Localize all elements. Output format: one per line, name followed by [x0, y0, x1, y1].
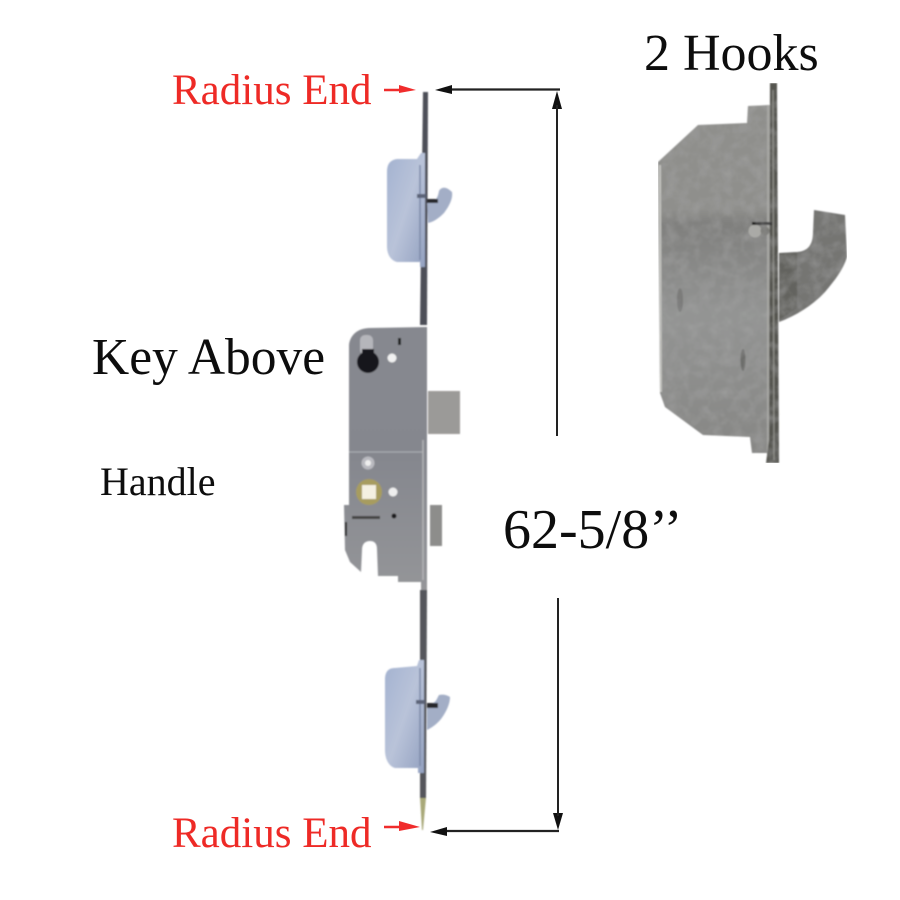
lower hook bolt: [385, 660, 450, 773]
latch bolt: [428, 391, 460, 434]
rod: upper: [420, 92, 428, 325]
upper hook bolt: [387, 153, 452, 267]
rod: brass tip: [420, 798, 426, 830]
keyhole: [360, 335, 373, 355]
label: Key Above: Key Above: [92, 329, 325, 386]
dimension: 62-5/8 inches: 62-5/8’’: [503, 499, 682, 561]
deadbolt: [430, 505, 442, 546]
arrow: top red pointer: [384, 85, 416, 93]
screw holes: [388, 354, 396, 362]
label: bottom Radius End: Radius End: [172, 810, 371, 857]
slot: [352, 516, 380, 519]
dimension line: top arrow and vertical segment: [435, 85, 562, 436]
label: Handle: Handle: [100, 459, 216, 504]
rod: lower: [420, 590, 427, 798]
arrow: bottom red pointer: [384, 821, 420, 831]
lock case: [344, 327, 427, 590]
large hook detail: [658, 83, 847, 463]
illustration: full lock assembly: [344, 92, 460, 830]
label: top Radius End: Radius End: [172, 67, 371, 114]
heading: 2 Hooks: 2 Hooks: [644, 25, 819, 82]
dimension line: bottom arrow and vertical segment: [430, 598, 563, 836]
pin: [748, 224, 762, 238]
handle spindle: [356, 479, 382, 505]
